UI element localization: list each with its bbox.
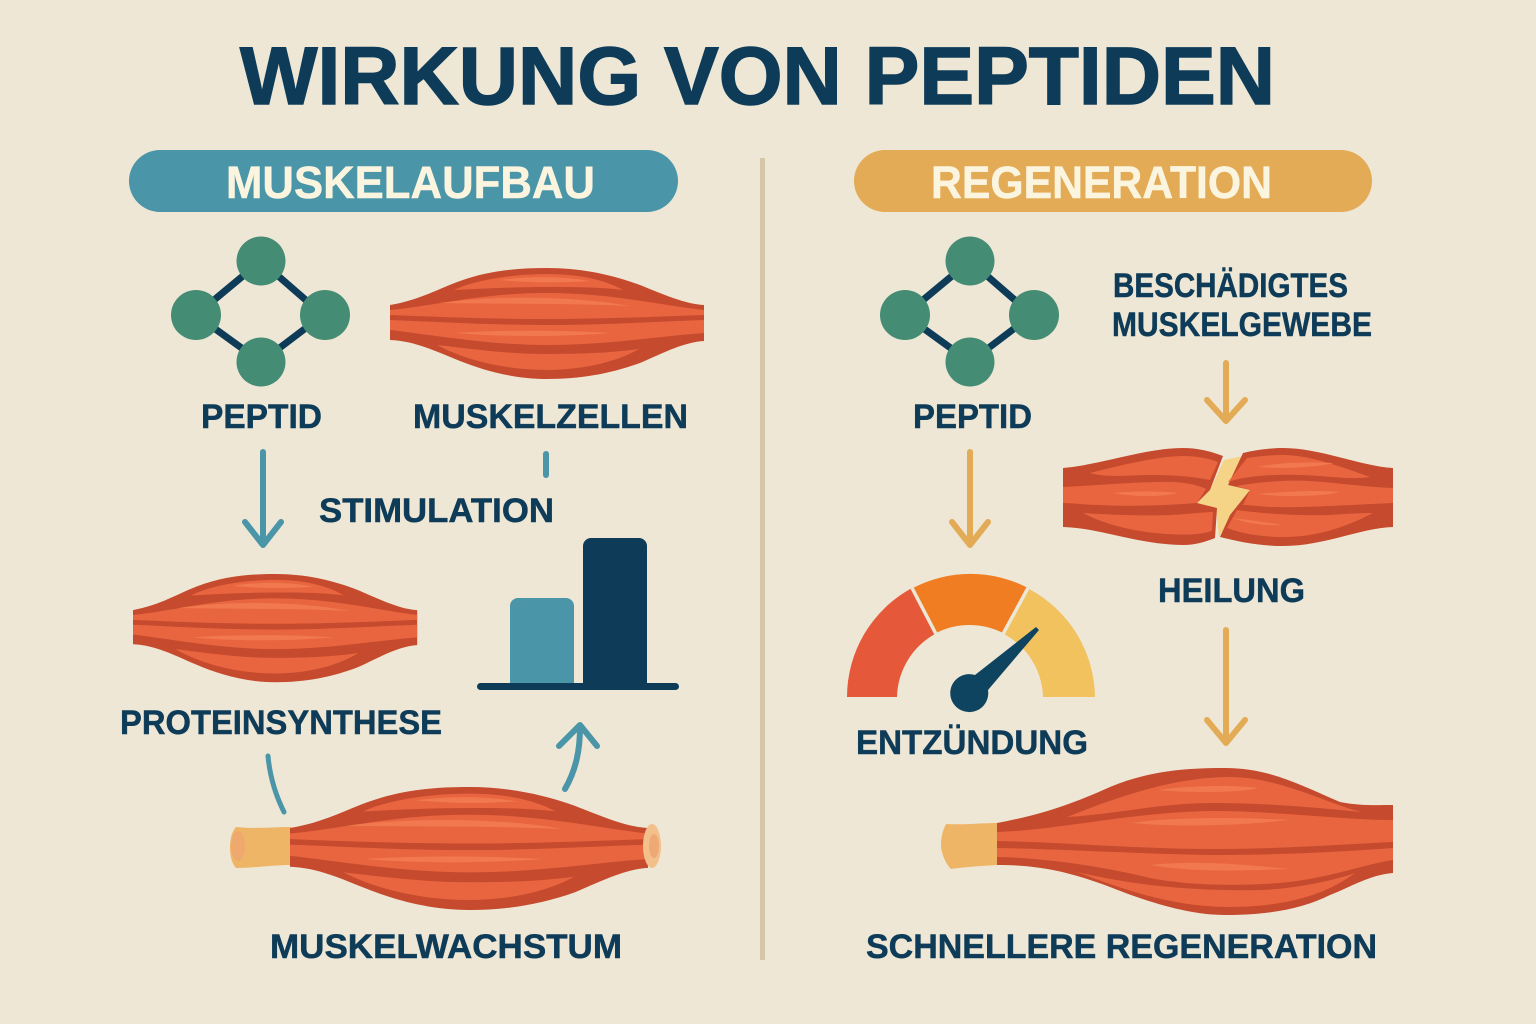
icon: regenerated muscle bbox=[941, 768, 1393, 915]
center divider bbox=[760, 158, 765, 960]
icon: muscle cells bbox=[390, 268, 704, 379]
label: Beschädigtes Muskelgewebe: MUSKELGEWEBE bbox=[1112, 306, 1372, 344]
label: Peptid: PEPTID bbox=[201, 398, 322, 436]
icon: peptide molecule bbox=[171, 236, 350, 386]
arrow: growth to chart bbox=[559, 725, 597, 789]
label: Stimulation: STIMULATION bbox=[319, 492, 554, 530]
icon: peptide molecule bbox=[880, 236, 1059, 386]
arrow: healing down bbox=[1207, 630, 1245, 743]
label: Entzündung: ENTZÜNDUNG bbox=[856, 724, 1088, 762]
label: Muskelzellen: MUSKELZELLEN bbox=[413, 398, 688, 436]
label: Peptid: PEPTID bbox=[913, 398, 1032, 436]
icon: torn muscle bbox=[1063, 448, 1393, 546]
icon: muscle growth bbox=[230, 787, 661, 910]
label: Beschädigtes Muskelgewebe bbox=[1112, 267, 1372, 344]
heading pill: Regeneration bbox=[854, 150, 1372, 212]
arrow: damaged tissue down bbox=[1207, 363, 1245, 421]
label: Schnellere Regeneration: SCHNELLERE REGENERATION bbox=[866, 928, 1377, 966]
title: WIRKUNG VON PEPTIDEN bbox=[240, 31, 1275, 122]
bar chart bbox=[477, 538, 679, 690]
heading pill: Muskelaufbau: MUSKELAUFBAU bbox=[226, 157, 595, 208]
arrow: peptide down bbox=[245, 452, 281, 545]
heading pill: Muskelaufbau bbox=[129, 150, 678, 212]
connector: muscle cells to stimulation bbox=[543, 454, 549, 475]
connector: protein synthesis to growth bbox=[268, 756, 284, 812]
heading pill: Regeneration: REGENERATION bbox=[931, 157, 1272, 208]
panel: Muskelaufbau bbox=[120, 150, 704, 966]
label: Beschädigtes Muskelgewebe: BESCHÄDIGTES bbox=[1113, 267, 1348, 305]
label: Heilung: HEILUNG bbox=[1158, 572, 1305, 610]
label: Proteinsynthese: PROTEINSYNTHESE bbox=[120, 704, 442, 742]
icon: protein synthesis muscle bbox=[133, 574, 417, 682]
gauge: inflammation bbox=[847, 574, 1095, 712]
panel: Regeneration bbox=[847, 150, 1393, 966]
arrow: peptide to inflammation bbox=[952, 452, 988, 545]
label: Muskelwachstum: MUSKELWACHSTUM bbox=[270, 928, 622, 966]
